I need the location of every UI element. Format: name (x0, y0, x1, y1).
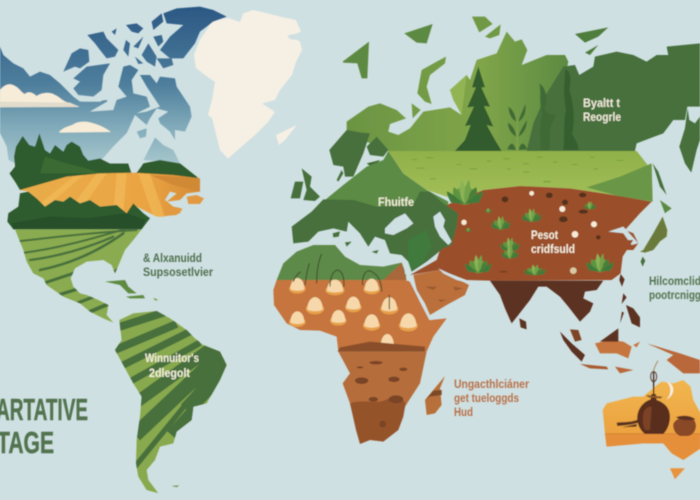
south america striped fields (114, 310, 228, 494)
label: south america (145, 353, 199, 380)
label: asia soil: Pesot (531, 228, 558, 242)
label: europe: Fhuitfe (378, 195, 414, 209)
central america striped fields (14, 228, 158, 323)
label: north america: Supsosetlvier (143, 267, 213, 279)
africa: sprout lines (293, 254, 389, 309)
soil region of asia (443, 186, 652, 250)
label: indian ocean: get tueloggds (454, 391, 519, 405)
label: north america: & Alxanuidd (143, 253, 202, 265)
red sea and persian gulf (403, 260, 470, 320)
greenland in cream (194, 10, 302, 159)
europe mainland and middle east dark green (292, 192, 458, 272)
title fragment (0, 392, 88, 460)
australia (603, 380, 700, 479)
africa: savanna with tubers (273, 278, 447, 352)
eastern europe mid green (325, 151, 448, 217)
india and south east asia in dark soil (490, 281, 603, 329)
label: siberia: Byaltt t (583, 96, 620, 110)
wheat field (20, 173, 204, 217)
indonesia (560, 328, 700, 373)
fern and vines (507, 70, 578, 151)
arctic islands of eurasia (343, 17, 608, 118)
siberia dark green (527, 43, 700, 173)
title fragment: ARTATIVE (0, 392, 88, 427)
label: north america (143, 253, 213, 279)
label: south america: 2dlegolt (149, 368, 190, 380)
eurasia: northern taiga light green (347, 32, 568, 151)
arabia (413, 270, 469, 315)
label: siberia (583, 96, 621, 124)
pine tree (455, 67, 502, 151)
label: south america: Winnuitor's (145, 353, 199, 365)
africa: grassland top (277, 245, 407, 280)
north american forest (9, 133, 200, 190)
africa: soil layers (338, 342, 427, 444)
label: pacific (649, 274, 700, 302)
icon: clay bottle and pot (617, 361, 696, 436)
grassland band (388, 151, 653, 202)
hudson bay water (0, 129, 155, 180)
north america: sky and arctic islands (0, 7, 227, 167)
lower forest band (7, 192, 150, 229)
label: asia soil (531, 228, 575, 256)
japan and east asian islands (643, 163, 672, 250)
soil crops and plants (447, 180, 601, 251)
label: siberia: Reogrle (583, 110, 621, 124)
taiwan and philippines islands (619, 242, 660, 327)
soil region continued with plants (410, 240, 633, 281)
scandinavia and finland (329, 130, 388, 182)
madagascar (425, 376, 445, 415)
label: indian ocean: Ungacthlciáner (454, 377, 529, 391)
soil crops lower row (465, 247, 614, 275)
label: indian ocean: Hud (454, 405, 473, 419)
label: indian ocean (454, 377, 529, 419)
british isles (291, 168, 320, 201)
clouds (0, 84, 111, 133)
label: asia soil: cridfsuld (531, 242, 575, 256)
